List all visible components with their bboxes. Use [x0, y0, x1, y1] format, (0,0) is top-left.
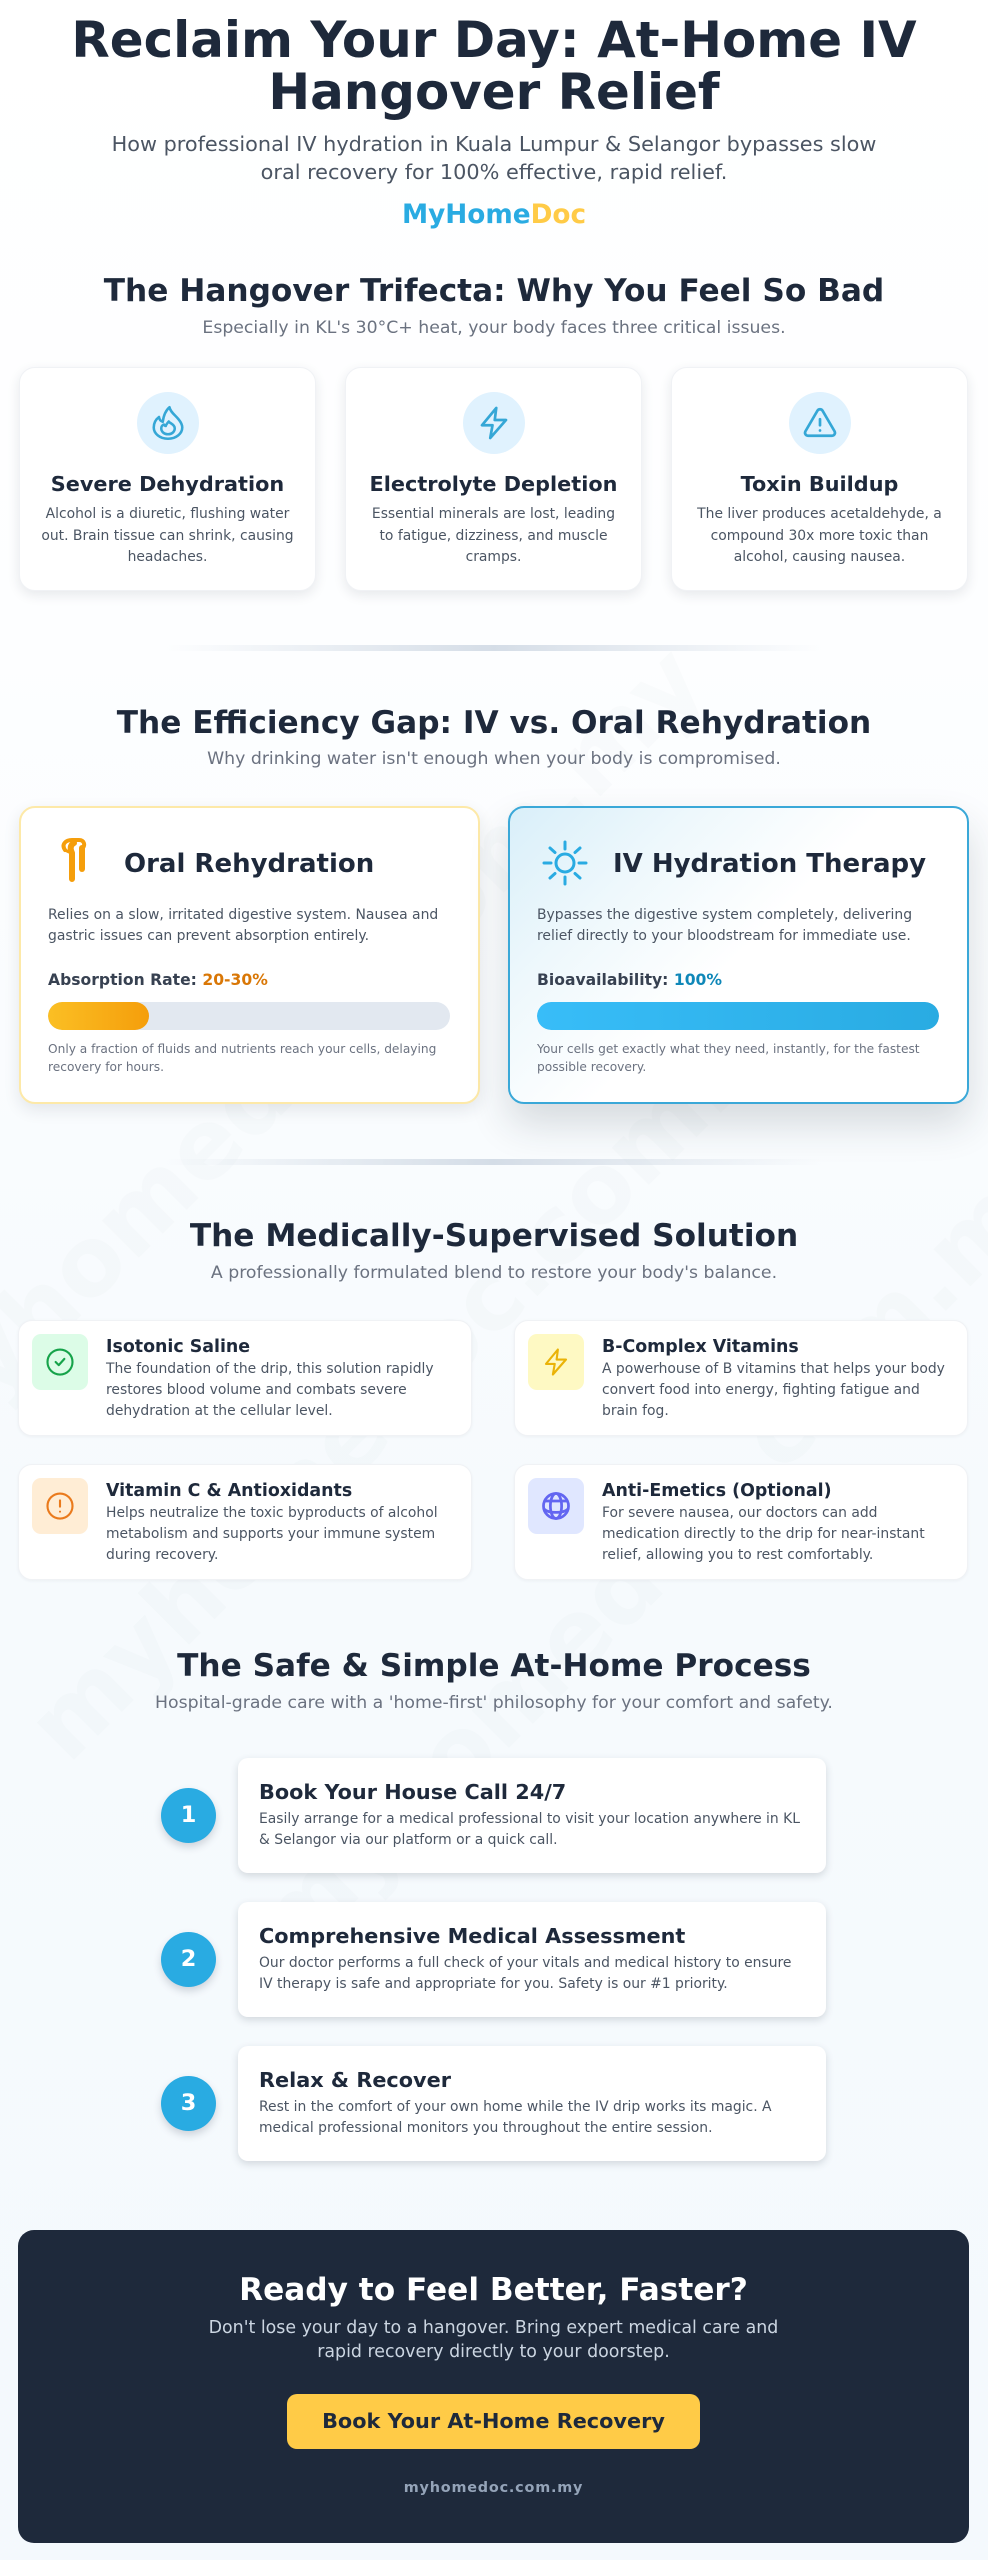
cta button — [287, 2394, 700, 2449]
subtitle — [112, 132, 876, 184]
panel: b-complex vitamins — [514, 1320, 968, 1436]
ingredient text: Helps neutralize the toxic byproducts of alcohol — [106, 1505, 438, 1521]
panel: iv hydration therapy — [508, 806, 969, 1104]
card title: Toxin Buildup — [741, 472, 898, 496]
absorption rate label: Absorption Rate: 20-30% — [48, 971, 268, 989]
card note: Only a fraction of fluids and nutrients reach your cells, delaying — [48, 1042, 436, 1056]
card text — [537, 907, 912, 944]
ingredient text: For severe nausea, our doctors can add — [602, 1505, 878, 1521]
brand logo: MyHomeDoc — [402, 200, 586, 230]
section subheading: solution: A professionally formulated blend to restore your body's balance. — [211, 1263, 777, 1283]
card heading: IV Hydration Therapy — [613, 849, 926, 879]
step text — [259, 1955, 791, 1992]
icon: lightning bolt — [463, 392, 525, 454]
bioavailability label: Bioavailability: 100% — [537, 971, 722, 989]
cta text — [209, 2318, 778, 2362]
step title: Comprehensive Medical Assessment — [259, 1924, 685, 1948]
card text — [372, 506, 615, 565]
step text: Rest in the comfort of your own home while the IV drip works its magic. A — [259, 2099, 772, 2115]
section heading: solution: The Medically-Supervised Solution — [190, 1218, 798, 1254]
card text: headaches. — [128, 549, 207, 565]
card note: Your cells get exactly what they need, instantly, for the fastest — [537, 1042, 920, 1056]
title: Reclaim Your Day: At-Home IV — [71, 11, 917, 69]
icon: lightning bolt — [528, 1334, 584, 1390]
card note: recovery for hours. — [48, 1060, 164, 1074]
card title: Severe Dehydration — [51, 472, 284, 496]
ingredient text — [602, 1505, 925, 1563]
ingredient text: metabolism and supports your immune system — [106, 1526, 435, 1542]
panel: severe dehydration — [19, 367, 316, 591]
icon: warning triangle — [789, 392, 851, 454]
icon: alert circle — [32, 1478, 88, 1534]
card text: The liver produces acetaldehyde, a — [697, 506, 942, 522]
card text — [41, 506, 294, 565]
card note: possible recovery. — [537, 1060, 646, 1074]
title — [71, 11, 917, 121]
cta button: Book Your At-Home Recovery — [322, 2409, 665, 2433]
panel: anti-emetics — [514, 1464, 968, 1580]
card note — [537, 1042, 920, 1074]
card text: to fatigue, dizziness, and muscle — [379, 528, 608, 544]
step number 1: 1 — [181, 1802, 196, 1828]
panel: isotonic saline — [18, 1320, 472, 1436]
section heading: process: The Safe & Simple At-Home Process — [177, 1648, 811, 1684]
step text: medical professional monitors you throughout the entire session. — [259, 2120, 713, 2136]
ingredient text — [106, 1361, 434, 1419]
progress bar: 25% — [48, 1002, 450, 1030]
step text: & Selangor via our platform or a quick call. — [259, 1832, 558, 1848]
panel: toxin buildup — [671, 367, 968, 591]
step text: Easily arrange for a medical professional to visit your location anywhere in KL — [259, 1811, 800, 1827]
ingredient text: convert food into energy, fighting fatigue and — [602, 1382, 920, 1398]
panel: electrolyte depletion — [345, 367, 642, 591]
ingredient text: during recovery. — [106, 1547, 218, 1563]
section subheading: process: Hospital-grade care with a 'home-first' philosophy for your comfort and safety. — [155, 1693, 833, 1713]
card text: out. Brain tissue can shrink, causing — [41, 528, 294, 544]
title: Hangover Relief — [268, 63, 720, 121]
card heading: Oral Rehydration — [124, 849, 374, 879]
icon: globe — [528, 1478, 584, 1534]
ingredient text: medication directly to the drip for near-instant — [602, 1526, 925, 1542]
step title: Book Your House Call 24/7 — [259, 1780, 566, 1804]
ingredient text: restores blood volume and combats severe — [106, 1382, 407, 1398]
card text: Bypasses the digestive system completely, delivering — [537, 907, 912, 923]
icon: oral — [61, 838, 86, 882]
icon: flame — [137, 392, 199, 454]
ingredient title: Isotonic Saline — [106, 1337, 250, 1357]
card text — [697, 506, 942, 565]
card text: Alcohol is a diuretic, flushing water — [46, 506, 289, 522]
subtitle: How professional IV hydration in Kuala Lumpur & Selangor bypasses slow — [112, 132, 876, 156]
ingredient text — [602, 1361, 945, 1419]
card note — [48, 1042, 436, 1074]
icon: sun — [542, 840, 588, 886]
icon: check circle — [32, 1334, 88, 1390]
step title: Relax & Recover — [259, 2068, 451, 2092]
card text: Relies on a slow, irritated digestive system. Nausea and — [48, 907, 438, 923]
subtitle: oral recovery for 100% effective, rapid relief. — [261, 160, 727, 184]
card title: Electrolyte Depletion — [370, 472, 617, 496]
ingredient title: B-Complex Vitamins — [602, 1337, 799, 1357]
card text: Essential minerals are lost, leading — [372, 506, 615, 522]
panel: oral rehydration — [19, 806, 480, 1104]
panel: call to action — [18, 2230, 969, 2543]
panel: vitamin c — [18, 1464, 472, 1580]
section subheading: efficiency gap: Why drinking water isn't enough when your body is compromised. — [207, 749, 781, 769]
ingredient text — [106, 1505, 438, 1563]
step text: IV therapy is safe and appropriate for you. Safety is our #1 priority. — [259, 1976, 728, 1992]
step text — [259, 1811, 800, 1848]
step number 1 — [161, 1788, 216, 1843]
step number 2 — [161, 1932, 216, 1987]
card text: alcohol, causing nausea. — [734, 549, 905, 565]
panel: step 3 — [238, 2046, 826, 2161]
card text: relief directly to your bloodstream for immediate use. — [537, 928, 911, 944]
section heading: trifecta: The Hangover Trifecta: Why You Feel So Bad — [104, 273, 884, 309]
card text: gastric issues can prevent absorption entirely. — [48, 928, 369, 944]
watermark background: myhomedoc.com.my — [5, 916, 871, 1782]
cta text: rapid recovery directly to your doorstep. — [317, 2342, 670, 2362]
panel: step 1 — [238, 1758, 826, 1873]
ingredient text: brain fog. — [602, 1403, 669, 1419]
cta text: Don't lose your day to a hangover. Bring expert medical care and — [209, 2318, 778, 2338]
panel: step 2 — [238, 1902, 826, 2017]
section heading: efficiency gap: The Efficiency Gap: IV vs. Oral Rehydration — [117, 705, 871, 741]
step text: Our doctor performs a full check of your vitals and medical history to ensure — [259, 1955, 791, 1971]
section subheading: trifecta: Especially in KL's 30°C+ heat, your body faces three critical issues. — [202, 318, 786, 338]
website url: myhomedoc.com.my — [404, 2480, 583, 2496]
ingredient text: dehydration at the cellular level. — [106, 1403, 333, 1419]
step text — [259, 2099, 772, 2136]
ingredient title: Anti-Emetics (Optional) — [602, 1481, 832, 1501]
ingredient text: A powerhouse of B vitamins that helps your body — [602, 1361, 945, 1377]
cta heading: Ready to Feel Better, Faster? — [239, 2272, 748, 2308]
ingredient title: Vitamin C & Antioxidants — [106, 1481, 352, 1501]
step number 3: 3 — [181, 2090, 196, 2116]
ingredient text: relief, allowing you to rest comfortably. — [602, 1547, 873, 1563]
step number 2: 2 — [181, 1946, 196, 1972]
card text: cramps. — [466, 549, 521, 565]
card text — [48, 907, 438, 944]
progress bar: 100% — [537, 1002, 939, 1030]
ingredient text: The foundation of the drip, this solution rapidly — [106, 1361, 434, 1377]
step number 3 — [161, 2076, 216, 2131]
card text: compound 30x more toxic than — [711, 528, 928, 544]
